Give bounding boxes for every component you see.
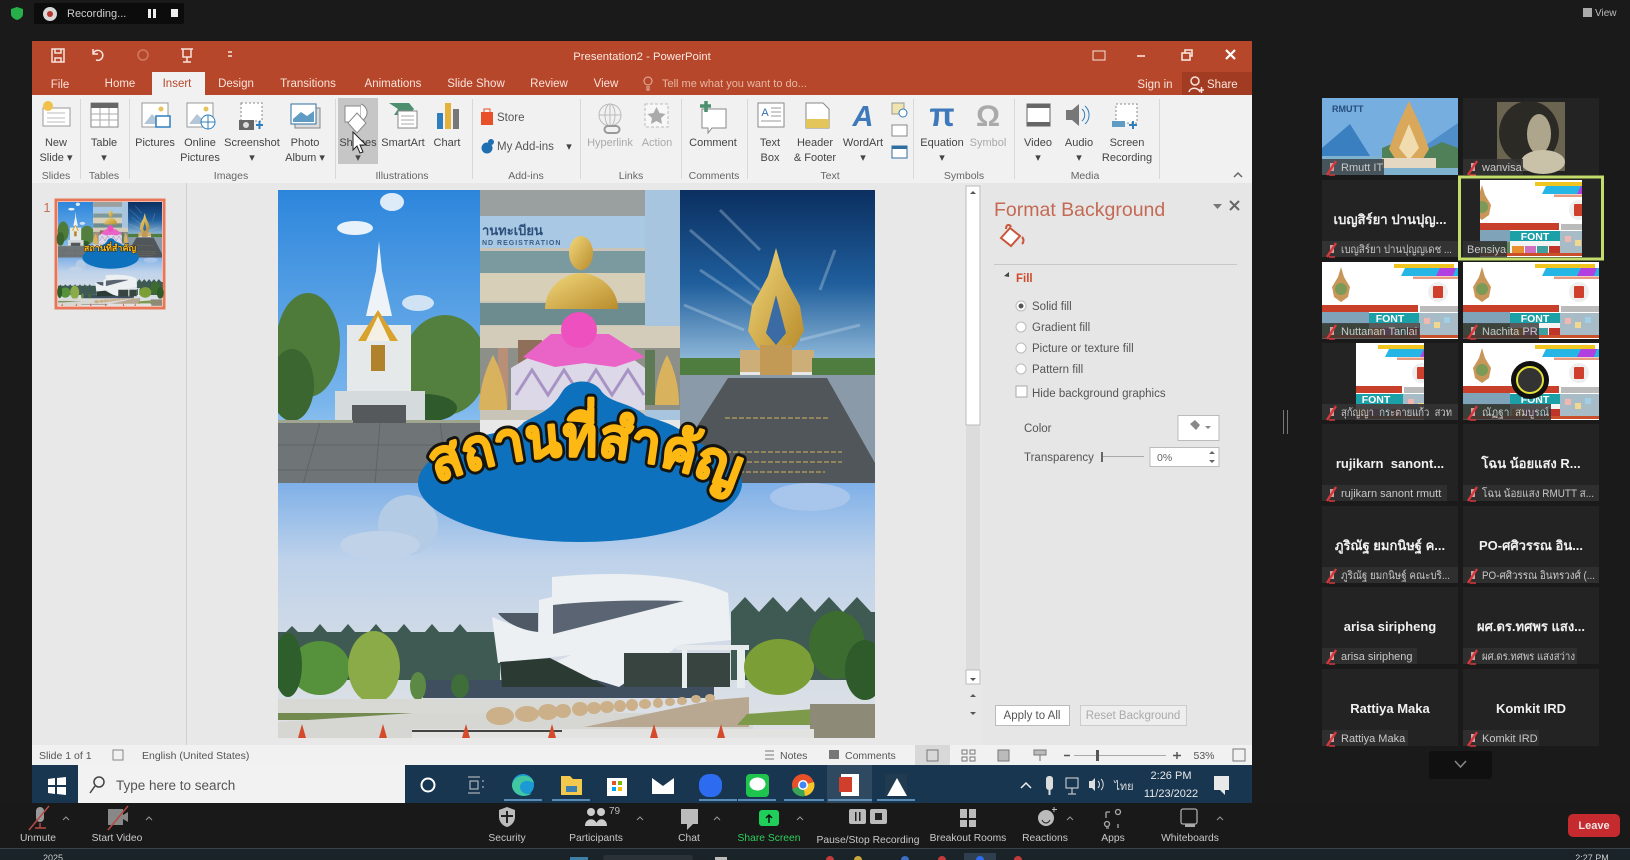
ribbon labels: WordArt [843,137,883,149]
breakout rooms [930,809,1006,844]
tile: Nachita PR: FONT [1521,313,1550,325]
ribbon tabs: Tell me what you want to do... [662,78,807,90]
tile: Bensiya active speaker: Bensiya [1467,244,1507,256]
tile: Komkit [1463,669,1599,746]
whiteboards [1161,809,1223,844]
view button: View [1595,8,1617,19]
tile: Natthatha: FONT [1521,394,1550,406]
tile: arisa: arisa siripheng [1341,651,1413,663]
status bar: Comments [845,750,896,762]
photo: statue at building [479,190,680,420]
ribbon labels: Action [642,137,672,149]
photo: monument [680,190,875,485]
unmute [20,806,152,844]
ribbon labels: ▾ [1076,152,1082,164]
ribbon labels: Album ▾ [285,152,325,164]
fill radio options: Hide background graphics [1032,388,1166,400]
fill radio options [1016,301,1219,466]
ribbon tabs: Slide Show [447,78,505,90]
tile: chanoi: โฉน น้อยแสง R... [1480,455,1581,471]
photo: modern building [274,483,885,738]
ribbon tabs: Animations [365,78,422,90]
sign text on building: านทะเบียน [482,223,543,238]
ribbon labels: Screenshot [224,137,280,149]
tile: Sukanya: FONT [1362,394,1391,406]
ribbon labels: Comment [689,137,737,149]
icon: stop [171,9,178,17]
tile: Nachita PR [1463,262,1599,339]
fill radio options: Transparency [1024,452,1094,464]
ribbon labels: ▾ [1035,152,1041,164]
tile: purinat: ภูริณัฐ ยมกนิษฐ์ คณะบริ... [1341,569,1450,582]
share screen [738,810,803,844]
highlight: shapes button [338,98,378,164]
tile: benyasiriya: เบญสิร์ยา ปานปุญ... [1334,212,1446,228]
fill radio options: Pattern fill [1032,364,1083,376]
tile: rujikarn: rujikarn sanont... [1336,456,1444,471]
ribbon tabs: Design [218,78,254,90]
slide thumbnail pane: 1 [43,200,51,215]
tile: thotsaporn: ผศ.ดร.ทศพร แสงสว่าง [1482,651,1575,663]
reactions: Reactions [1022,833,1068,844]
tile: Nuttanan Tanlai: FONT [1376,313,1405,325]
tile: Nuttanan Tanlai [1322,262,1458,339]
tile: chanoi: โฉน น้อยแสง RMUTT ส... [1482,486,1594,500]
participants gallery [1306,98,1602,779]
unmute: Unmute [20,833,56,844]
ribbon labels: ▾ [101,152,107,164]
tile: Sukanya: สุกัญญา กระตายแก้ว สวท [1341,407,1452,419]
pause stop recording [816,809,920,846]
leave button: Leave [1578,820,1610,832]
ribbon labels: Pictures [135,137,175,149]
participants: 79 [609,806,621,817]
window title: Presentation2 - PowerPoint [573,51,712,63]
ribbon tabs [51,72,1252,95]
tile: Komkit: Komkit IRD [1482,733,1538,745]
ribbon labels: Comments [689,170,739,182]
ribbon labels: ▾ [355,152,361,164]
fill radio options: Color [1024,423,1052,435]
tile: arisa [1322,587,1458,664]
tile: Rmutt IT: RMUTT [1332,104,1364,114]
tile: Nuttanan Tanlai: Nuttanan Tanlai [1341,326,1417,338]
tile: purinat: ภูริณัฐ ยมกนิษฐ์ ค... [1335,538,1445,555]
icon: paint bucket [1001,225,1024,246]
tile: wanvisa: wanvisa [1481,162,1523,174]
buttons [996,706,1186,726]
participant divider [1284,410,1288,434]
windows taskbar: ไทย [1113,780,1134,793]
ribbon labels: ▾ [939,152,945,164]
tile: Rattiya [1322,669,1458,746]
ribbon labels: & Footer [794,152,836,164]
ribbon labels: Equation [920,137,964,149]
tile: Rattiya: Rattiya Maka [1350,701,1431,716]
icon: pause [148,9,156,18]
ribbon labels: ▾ [860,152,866,164]
ribbon labels [39,112,1242,182]
start video: Start Video [92,833,143,844]
windows taskbar [32,765,1252,803]
title shape [418,382,742,542]
tile: PO: PO-ศศิวรรณ อิน... [1479,538,1583,553]
ribbon labels: Text [820,170,840,182]
tree line [278,597,879,680]
ribbon labels: Box [761,152,780,164]
tile: wanvisa [1463,98,1599,175]
ribbon labels: Illustrations [375,170,429,182]
tile: purinat [1322,506,1458,583]
photo: shrine [270,190,487,496]
ribbon labels: Pictures [180,152,220,164]
main slide [278,190,875,738]
ribbon labels: Audio [1065,137,1093,149]
cursor [353,132,366,153]
ribbon tabs: Home [105,78,135,90]
ground [278,699,618,713]
ribbon tabs: View [594,78,619,90]
tile: Natthatha: ณัฏฐา สมบูรณ์ [1482,406,1549,419]
tile: thotsaporn: ผศ.ดร.ทศพร แสง... [1477,619,1585,634]
tile: benyasiriya [1322,180,1458,257]
ribbon tabs: Transitions [280,78,336,90]
tile: Nachita PR: Nachita PR [1482,326,1538,338]
trees [290,641,350,695]
ribbon labels: SmartArt [381,137,425,149]
ribbon labels: Video [1024,137,1052,149]
tile: Rmutt IT [1322,98,1458,175]
ribbon icons: Ω [976,100,1000,133]
title text: สถานที่สำคัญ [426,394,747,502]
view button [1583,8,1617,19]
tile: Sukanya [1306,343,1458,420]
quick access toolbar [52,49,232,62]
ribbon labels: Photo [291,137,319,149]
apps [1101,810,1125,844]
ribbon labels: Tables [89,170,119,182]
recording label: Recording... [67,8,126,20]
ribbon icons [43,96,1137,158]
participants [569,806,643,844]
tile: Bensiya active speaker: FONT [1521,231,1550,243]
breakout rooms: Breakout Rooms [930,833,1006,844]
status bar: 53% [1193,750,1215,762]
ribbon tabs: File [51,79,69,91]
bottom windows strip [0,848,1630,860]
tile: thotsaporn [1463,587,1599,664]
slide scrollbar [966,186,980,715]
ribbon labels: Slide ▾ [39,152,73,164]
tile: Natthatha [1463,343,1599,420]
tile: Rmutt IT: Rmutt IT [1341,162,1383,174]
ribbon labels: Chart [434,137,460,149]
share screen: Share Screen [738,833,801,844]
icon: shield [11,7,23,20]
ribbon tabs: Sign in [1137,79,1173,91]
chat: Chat [678,833,700,844]
sign text on building: ND REGISTRATION [482,240,561,247]
tile: rujikarn [1322,424,1458,501]
ribbon icons: π [929,96,955,133]
panel heading: Format Background [994,199,1165,221]
tile: rujikarn: rujikarn sanont rmutt [1341,488,1441,500]
ribbon labels: Slides [42,170,70,182]
fill radio options: Solid fill [1032,301,1072,313]
ribbon labels: Symbols [944,170,984,182]
ribbon labels: New [45,137,67,149]
panel: format background [982,183,1252,745]
ribbon labels: ▾ [249,152,255,164]
ribbon labels: Media [1071,170,1099,182]
whiteboards: Whiteboards [1161,833,1219,844]
chat [678,809,720,844]
window controls [1093,50,1235,60]
ribbon labels: Text [760,137,780,149]
ribbon tabs: Review [530,78,569,90]
fill section label: Fill [1016,273,1033,285]
leave button [1568,814,1620,837]
zoom toolbar [0,803,1630,848]
ribbon icons: A [761,107,769,119]
icon: recording [43,7,57,21]
ribbon labels: Screen [1110,137,1144,149]
ribbon labels: Header [797,137,833,149]
gallery next button [1429,751,1492,779]
tile: chanoi [1463,424,1599,501]
tile: arisa: arisa siripheng [1344,619,1436,634]
thumbnail title text: สถานที่สำคัญ [84,241,136,254]
ribbon labels: Links [619,170,643,182]
status bar [32,745,1252,765]
reactions [1022,807,1073,844]
ribbon labels: Online [184,137,216,149]
panel close controls [1213,201,1239,210]
title text: สถานที่สำคัญ [429,396,744,500]
fill radio options: 0% [1157,452,1172,464]
buttons: Apply to All [1004,710,1060,722]
sign text on building [482,223,561,247]
ribbon labels: ▾ [566,141,572,153]
slide thumbnail pane [32,183,186,745]
status bar: Notes [780,750,807,762]
fill radio options: Picture or texture fill [1032,343,1134,355]
status bar: Slide 1 of 1 [39,750,92,762]
tile: Rattiya: Rattiya Maka [1341,733,1406,745]
ribbon labels: Images [214,170,248,182]
ribbon labels: My Add-ins [497,141,554,153]
ribbon labels: Store [497,112,524,124]
status bar: English (United States) [142,750,249,762]
tile: Komkit: Komkit IRD [1496,701,1566,716]
ribbon labels: Table [91,137,117,149]
ribbon labels: Recording [1102,152,1152,164]
windows taskbar: 11/23/2022 [1144,788,1198,800]
group separators [80,99,1160,179]
ribbon icons: A [852,101,873,133]
search placeholder: Type here to search [116,778,235,793]
ribbon labels: Shapes [339,137,377,149]
buttons: Reset Background [1086,710,1180,722]
participants: Participants [569,833,623,844]
start video [92,806,143,844]
security [488,807,526,844]
ribbon labels: Hyperlink [587,137,633,149]
ribbon tabs: Share [1207,79,1238,91]
security: Security [488,833,526,844]
tile: benyasiriya: เบญสิร์ยา ปานปุญญเดช ... [1341,243,1452,256]
icon: start [48,777,66,795]
pause stop recording: Pause/Stop Recording [816,835,920,846]
ribbon labels: Add-ins [508,170,544,182]
building [492,574,731,687]
ribbon labels: Symbol [970,137,1006,149]
tile: Bensiya active speaker [1460,177,1602,259]
tile: PO [1463,506,1599,583]
apps: Apps [1101,833,1125,844]
windows taskbar: 2:26 PM [1151,770,1191,782]
ribbon tabs: Insert [163,78,192,90]
fill radio options: Gradient fill [1032,322,1090,334]
tile: PO: PO-ศศิวรรณ อินทรวงศ์ (... [1482,569,1595,582]
